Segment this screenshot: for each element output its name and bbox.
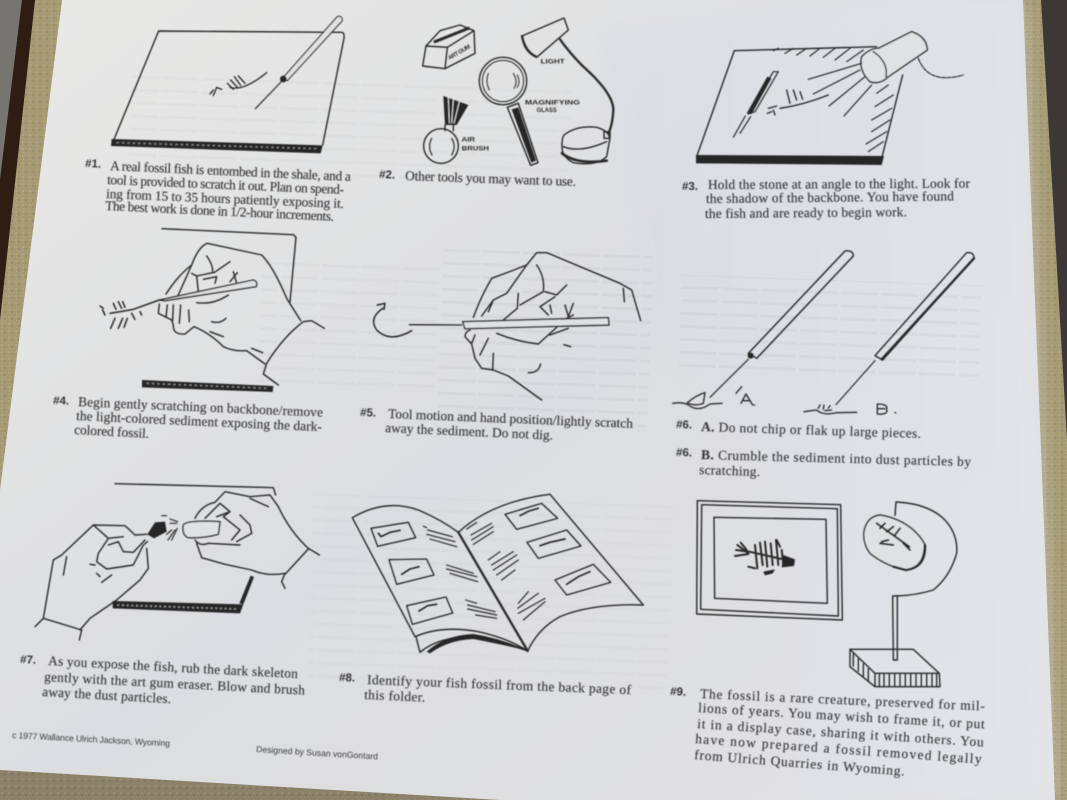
illustration 6: tool chipping versus scratching	[673, 251, 974, 414]
caption 3: the shadow of the backbone. You have found	[706, 188, 954, 206]
magnifying glass: MAGNIFYING	[525, 100, 580, 106]
caption 2: Other tools you may want to use.	[405, 168, 576, 189]
caption 6 B: #6.	[676, 447, 692, 459]
caption 5	[360, 406, 634, 443]
caption 3: Hold the stone at an angle to the light. Look for	[708, 176, 971, 192]
caption 6 B	[676, 447, 972, 479]
caption 8: Identify your fish fossil from the back page of	[367, 672, 632, 697]
illustration 1: shale slab with fossil and tool	[111, 16, 344, 153]
illustration 5: tool motion and hand position	[374, 253, 641, 400]
caption 7: away the dust particles.	[42, 684, 171, 706]
caption 7	[20, 653, 306, 706]
caption 7: #7.	[20, 654, 36, 667]
caption 3	[682, 176, 971, 221]
eraser	[423, 25, 475, 69]
illustration 7: hands brushing and rubbing with eraser	[35, 484, 319, 640]
caption 3: the fish and are ready to begin work.	[705, 204, 907, 221]
caption 4: colored fossil.	[74, 422, 150, 441]
tool A	[673, 251, 853, 409]
illustration 9: framed fossil and display stand	[697, 501, 957, 687]
caption 4	[53, 394, 323, 441]
stand	[850, 502, 957, 687]
desk lamp: LIGHT	[541, 60, 565, 66]
air brush	[424, 96, 489, 163]
caption 3: #3.	[682, 181, 698, 193]
caption 9: it in a display case, sharing it with others. You	[697, 716, 984, 750]
caption 1: #1.	[85, 158, 101, 171]
caption 4: Begin gently scratching on backbone/remove	[78, 394, 323, 420]
caption 9: from Ulrich Quarries in Wyoming.	[694, 747, 905, 779]
caption 9: have now prepared a fossil removed legally	[695, 731, 982, 767]
caption 8	[339, 672, 632, 705]
caption 7: As you expose the fish, rub the dark skeleton	[48, 653, 299, 681]
caption 1: ing from 15 to 35 hours patiently exposing it.	[106, 186, 344, 211]
caption 5: Tool motion and hand position/lightly scratch	[388, 406, 634, 431]
caption 4: #4.	[53, 395, 69, 408]
eraser: ART GUM	[447, 44, 472, 62]
illustration 4: hand scratching fossil	[100, 229, 324, 392]
caption 4: the light-colored sediment exposing the dark-	[76, 408, 322, 434]
caption 1: The best work is done in 1/2-hour increments.	[105, 198, 334, 224]
caption 1: tool is provided to scratch it out. Plan on spend-	[107, 172, 344, 197]
caption 9	[670, 686, 985, 779]
illustration 3: stone held to lamp light	[696, 32, 963, 165]
caption 5: #5.	[360, 407, 376, 420]
magnifying glass: GLASS	[537, 108, 557, 114]
caption 7: gently with the art gum eraser. Blow and brush	[44, 669, 306, 698]
frame	[697, 501, 842, 620]
air brush: BRUSH	[462, 147, 489, 153]
footer: copyright: c 1977 Wallance Ulrich Jackson, Wyoming	[12, 730, 170, 748]
caption 6 A: #6.	[676, 419, 692, 432]
caption 6 B: B. Crumble the sediment into dust particles by	[701, 447, 972, 469]
caption 8: #8.	[339, 672, 355, 685]
illustration 8: open identification folder	[352, 494, 643, 653]
caption 9: lions of years. You may wish to frame it, or put	[698, 700, 985, 732]
desk lamp	[522, 18, 613, 164]
caption 2: #2.	[379, 169, 395, 182]
air brush: AIR	[462, 138, 476, 144]
footer: designer credit: Designed by Susan vonGontard	[256, 744, 378, 761]
tool B	[804, 253, 974, 414]
caption 8: this folder.	[364, 687, 425, 705]
caption 6 B: scratching.	[699, 462, 760, 479]
illustration 2: other tools	[423, 18, 613, 165]
magnifying glass	[479, 57, 580, 165]
caption 9: The fossil is a rare creature, preserved for mil-	[700, 686, 985, 713]
caption 9: #9.	[670, 686, 686, 699]
caption 1: A real fossil fish is entombed in the shale, and a	[110, 158, 351, 184]
caption 1	[85, 158, 351, 224]
caption 5: away the sediment. Do not dig.	[385, 420, 553, 443]
caption 6 A: A. Do not chip or flak up large pieces.	[701, 419, 921, 441]
